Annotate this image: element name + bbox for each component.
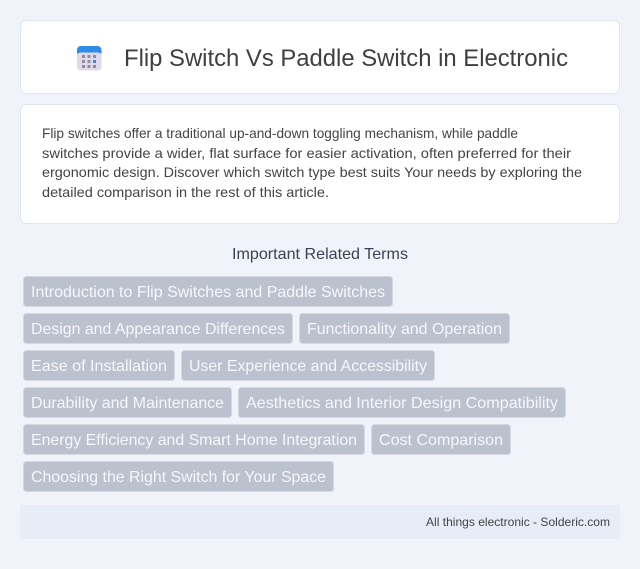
icon: calendar grid [77,46,102,70]
related term tags [24,276,566,492]
intro text panel: switches provide a wider, flat surface for easier activation, often preferred for their [42,145,571,161]
tag: durability [24,388,232,418]
tag: choosing [24,462,334,492]
tag: cost: Cost Comparison [379,432,503,449]
intro text panel: ergonomic design. Discover which switch type best suits Your needs by exploring the [42,164,582,180]
footer bar [20,505,620,539]
tag: user experience: User Experience and Accessibility [189,358,427,375]
tag: choosing: Choosing the Right Switch for Your Space [31,469,326,486]
tag: functionality [300,314,510,344]
tag: energy efficiency [24,424,364,454]
tag: aesthetics: Aesthetics and Interior Design Compatibility [246,395,558,412]
tag: durability: Durability and Maintenance [31,395,224,412]
tag: design: Design and Appearance Differences [31,321,285,338]
title panel [20,20,620,94]
title: Flip Switch Vs Paddle Switch in Electronic [124,45,568,72]
footer bar: All things electronic - Solderic.com [426,515,610,529]
intro text panel: Flip switches offer a traditional up-and-down toggling mechanism, while paddle [42,125,518,141]
tag: installation [24,350,174,380]
tag: installation: Ease of Installation [31,358,167,375]
tag: functionality: Functionality and Operation [307,321,502,338]
tag: cost [372,424,510,454]
tag: energy efficiency: Energy Efficiency and Smart Home Integration [31,432,357,449]
tag: introduction [24,276,392,306]
intro text panel: detailed comparison in the rest of this article. [42,184,329,200]
tag: user experience [182,350,434,380]
tag: aesthetics [238,388,566,418]
intro text panel [20,104,620,224]
section heading: Important Related Terms [232,246,408,263]
tag: design [24,314,292,344]
tag: introduction: Introduction to Flip Switches and Paddle Switches [31,284,385,301]
